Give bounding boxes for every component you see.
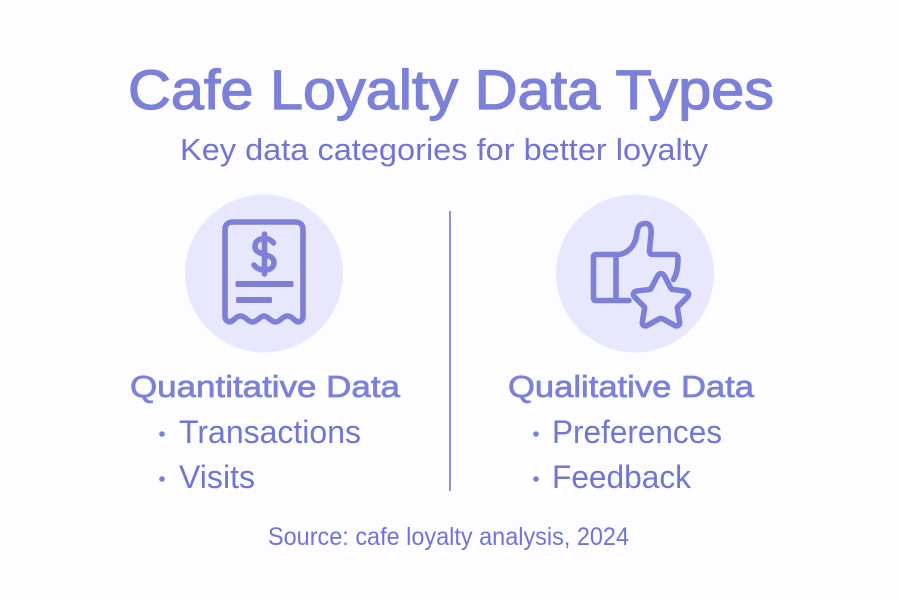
list: qualitative items: Feedback <box>552 459 692 495</box>
icon: thumbs up with star <box>556 194 714 352</box>
list: quantitative items: Visits <box>179 459 255 495</box>
subtitle: Key data categories for better loyalty <box>180 132 709 167</box>
icon: receipt with dollar sign <box>185 194 343 352</box>
divider <box>449 211 451 491</box>
list: quantitative items <box>159 414 361 495</box>
list: qualitative items: Preferences <box>552 414 722 450</box>
heading: qualitative data: Qualitative Data <box>508 369 755 404</box>
heading: quantitative data: Quantitative Data <box>130 369 401 404</box>
panel: qualitative data <box>508 194 755 495</box>
list: qualitative items <box>533 414 722 495</box>
list: quantitative items: Transactions <box>179 414 361 450</box>
panel: quantitative data <box>130 194 401 495</box>
title: Cafe Loyalty Data Types <box>128 58 774 121</box>
source note: Source: cafe loyalty analysis, 2024 <box>268 523 629 551</box>
